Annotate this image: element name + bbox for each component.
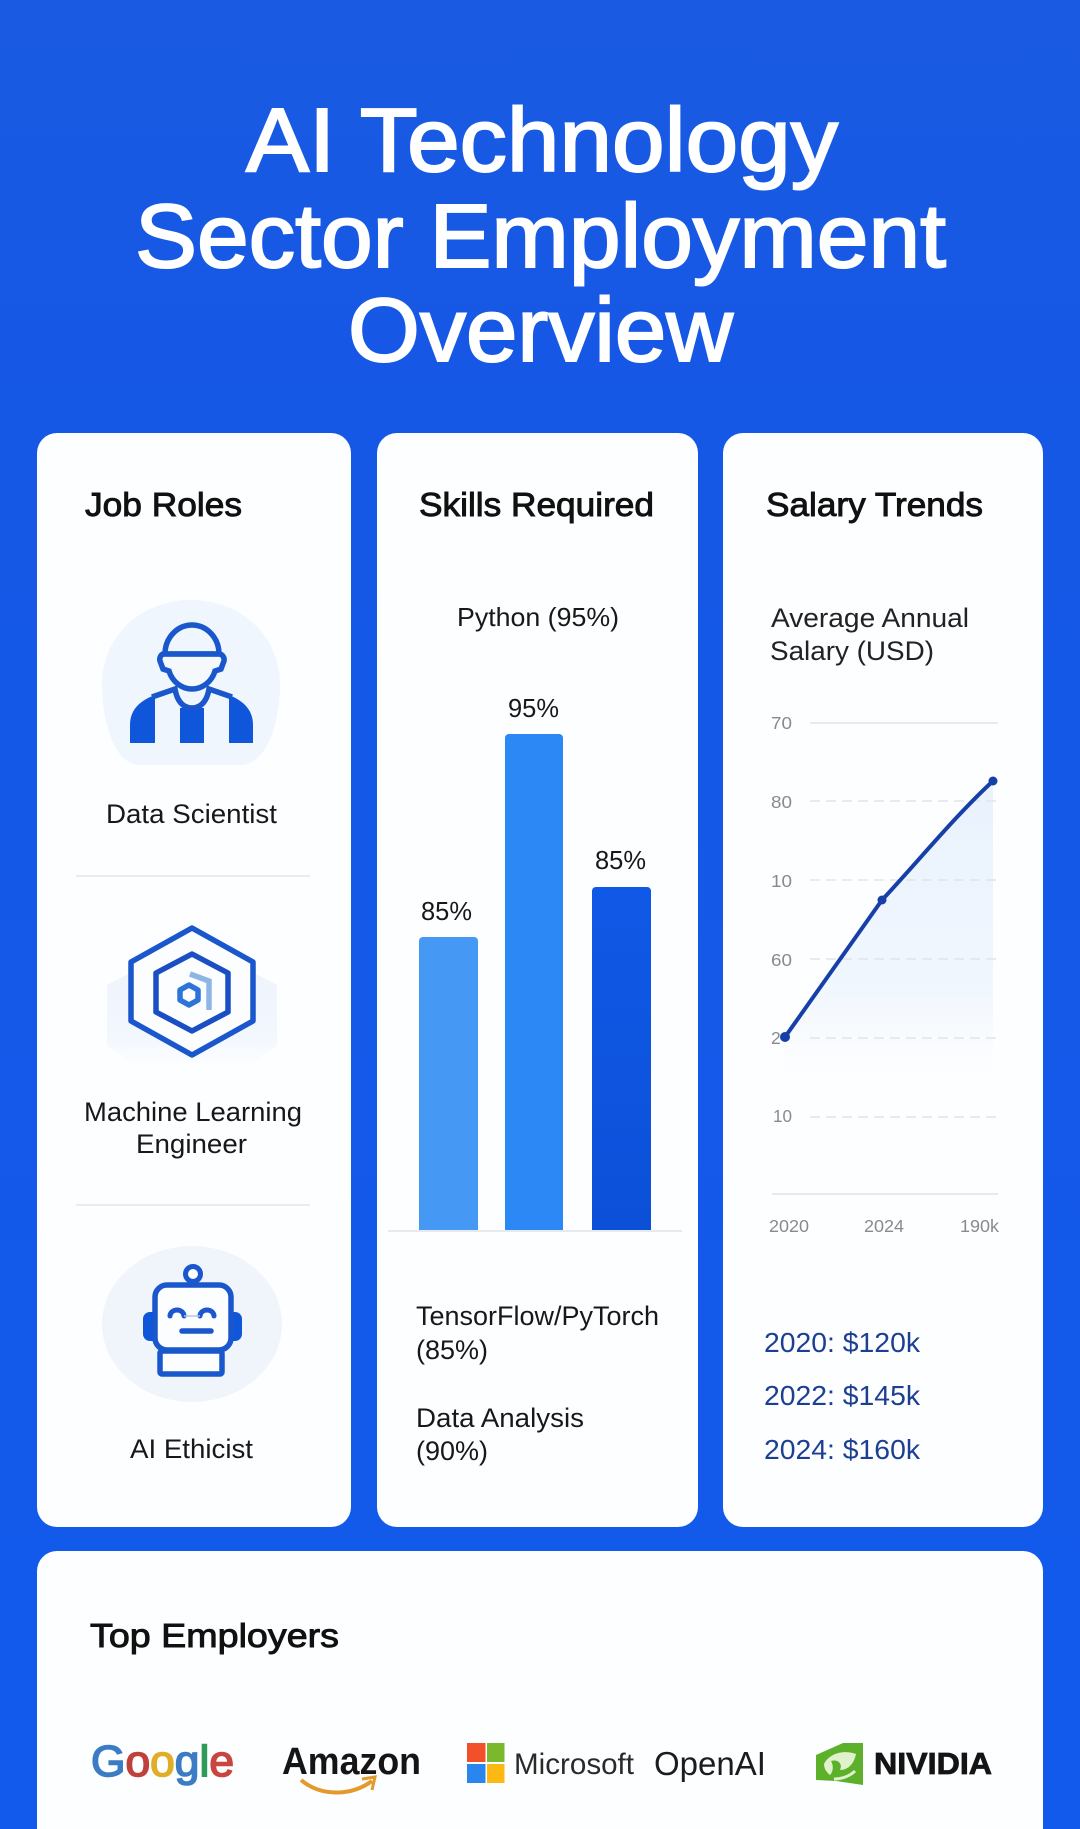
panel: salary trends (723, 433, 1043, 1527)
label: tensorflow (416, 1301, 659, 1365)
logo: nvidia: NIVIDIA (874, 1746, 992, 1781)
chart subtitle (770, 603, 969, 666)
salary values: 2022: $145k (764, 1380, 920, 1411)
line chart: salary: 2 (771, 1028, 781, 1048)
icon: machine learning engineer (107, 928, 277, 1068)
line chart: salary: 80 (771, 792, 792, 812)
line chart: salary: 10 (771, 871, 792, 891)
line chart: salary: 60 (771, 950, 792, 970)
logo: openai: OpenAI (654, 1745, 766, 1782)
panel: job roles (37, 433, 351, 1527)
title (135, 91, 946, 381)
title: AI Technology (246, 91, 838, 191)
line chart: salary (769, 713, 999, 1236)
icon: data scientist (102, 600, 280, 765)
label: data analysis: Data Analysis (416, 1403, 584, 1433)
logo: google: Google (91, 1737, 234, 1786)
heading: salary trends: Salary Trends (766, 486, 983, 523)
panel: top employers (37, 1551, 1043, 1829)
chart subtitle: Salary (USD) (770, 636, 934, 666)
line chart: salary: 190k (960, 1216, 999, 1236)
logo: amazon: Amazon (282, 1741, 421, 1783)
heading: job roles: Job Roles (85, 486, 242, 523)
icon: ai ethicist robot (102, 1246, 282, 1402)
title: Sector Employment (135, 187, 946, 287)
panel: skills required (377, 433, 698, 1527)
bar chart: skills: 95% (508, 693, 559, 723)
line chart: salary: 2024 (864, 1216, 904, 1236)
label: machine learning engineer: Machine Learning (84, 1097, 302, 1127)
heading: skills required: Skills Required (419, 486, 654, 523)
line chart: salary: 10 (773, 1106, 792, 1126)
label: data analysis: (90%) (416, 1436, 488, 1466)
label: tensorflow: TensorFlow/PyTorch (416, 1301, 659, 1331)
label: python: Python (95%) (457, 602, 619, 632)
label: machine learning engineer (84, 1097, 302, 1159)
line chart: salary: 70 (771, 713, 792, 733)
label: data scientist: Data Scientist (106, 799, 278, 829)
label: machine learning engineer: Engineer (136, 1129, 247, 1159)
salary values: 2024: $160k (764, 1434, 920, 1465)
label: data analysis (416, 1403, 584, 1466)
bar chart: skills: 85% (595, 845, 646, 875)
label: ai ethicist: AI Ethicist (130, 1434, 254, 1464)
salary values: 2020: $120k (764, 1327, 920, 1358)
bar chart: skills (388, 693, 682, 1231)
line chart: salary: 2020 (769, 1216, 809, 1236)
heading: top employers: Top Employers (90, 1617, 339, 1654)
logo: microsoft: Microsoft (514, 1748, 635, 1781)
logo: nvidia (816, 1743, 992, 1785)
chart subtitle: Average Annual (771, 603, 969, 633)
title: Overview (348, 281, 734, 381)
label: tensorflow: (85%) (416, 1335, 488, 1365)
logo: microsoft (467, 1743, 635, 1783)
salary values (764, 1327, 920, 1465)
bar chart: skills: 85% (421, 896, 472, 926)
